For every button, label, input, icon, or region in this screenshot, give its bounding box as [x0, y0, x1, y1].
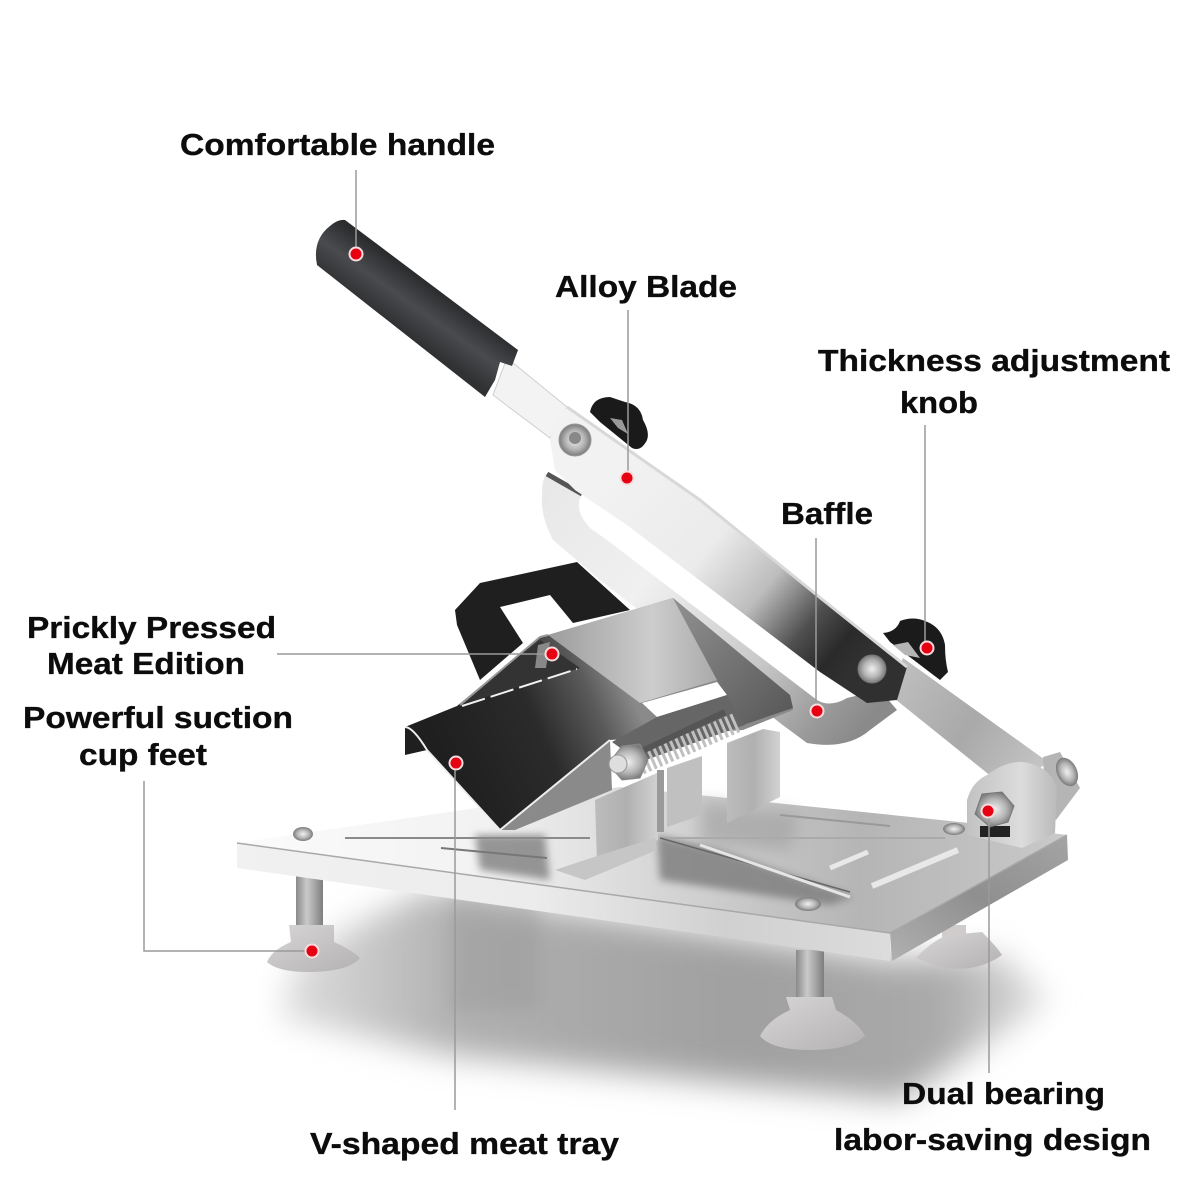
label: Prickly Pressed Meat Edition: Prickly Pressed: [27, 610, 276, 645]
upper knob: [590, 397, 648, 449]
label: Dual bearing labor-saving design: labor-saving design: [834, 1122, 1151, 1157]
V-shaped meat tray: [405, 598, 793, 830]
back right suction foot: [916, 925, 1002, 969]
base plate: [237, 787, 1068, 961]
label: Prickly Pressed Meat Edition: Meat Edition: [47, 646, 245, 681]
ground shadow: [280, 890, 1050, 1100]
front suction foot: [760, 950, 865, 1050]
label: Alloy Blade: Alloy Blade: [555, 269, 737, 304]
spring and bolt: [608, 712, 738, 780]
label: Powerful suction cup feet: [23, 700, 293, 772]
handle strap: [493, 358, 567, 438]
right end bolt: [1043, 752, 1082, 820]
label: Thickness adjustment knob: Thickness adjustment: [818, 343, 1170, 378]
label: Powerful suction cup feet: cup feet: [79, 737, 207, 772]
label: Dual bearing labor-saving design: [834, 1076, 1151, 1157]
baffle plate: [542, 473, 897, 745]
label: Prickly Pressed Meat Edition: [27, 610, 276, 681]
front and rear support legs: [555, 729, 780, 880]
alloy blade: [550, 407, 907, 703]
handle grip: [316, 220, 518, 397]
lower knob: [883, 618, 948, 680]
marker dots: [306, 248, 994, 958]
label: Thickness adjustment knob: [818, 343, 1170, 420]
label: Powerful suction cup feet: Powerful suction: [23, 700, 293, 735]
pivot arm: [890, 658, 1048, 790]
label: Thickness adjustment knob: knob: [900, 385, 978, 420]
leader lines: [144, 170, 989, 1110]
left suction foot: [267, 872, 360, 972]
black rear hopper frame: [455, 562, 630, 680]
label: V-shaped meat tray: V-shaped meat tray: [310, 1126, 620, 1161]
label: Comfortable handle: Comfortable handle: [180, 127, 495, 162]
label: Baffle: Baffle: [781, 496, 873, 531]
pivot block: [967, 762, 1057, 848]
label: Dual bearing labor-saving design: Dual bearing: [902, 1076, 1105, 1111]
